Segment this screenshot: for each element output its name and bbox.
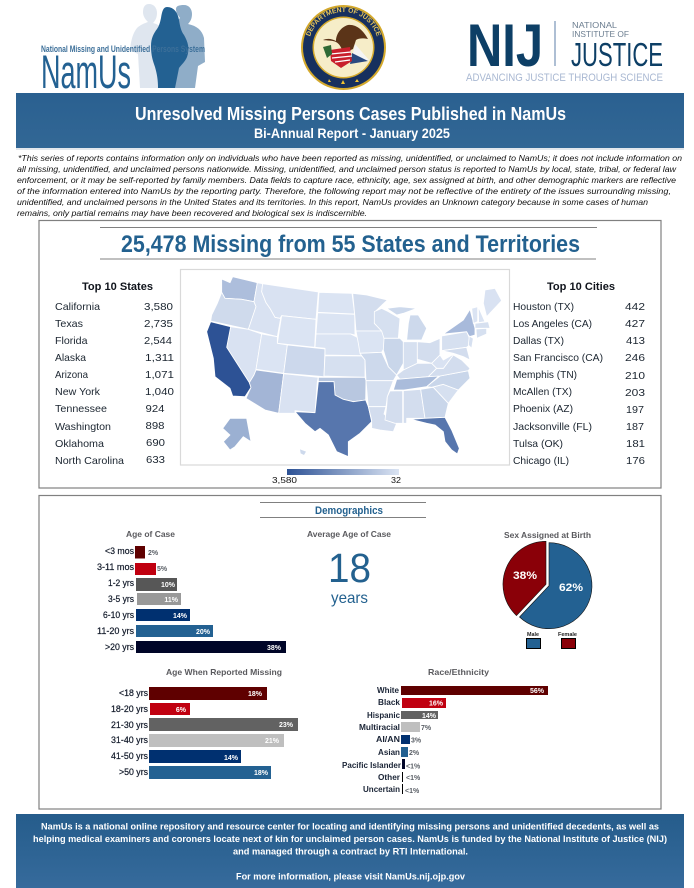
bar chart: race and ethnicity: Multiracial [359, 722, 400, 732]
stat: average age of case [307, 530, 391, 607]
map legend: 3,580 [272, 475, 297, 485]
bar chart: age when reported missing: 18% [254, 770, 269, 777]
bar chart: age of case: 3-11 mos [97, 562, 134, 572]
disclaimer text: unidentified, and unclaimed persons in the United States and its territories. In this report, NamUs provides an Unknown category because in some cases of human [17, 198, 648, 207]
table: top 10 states: North Carolina [55, 455, 124, 467]
bar chart: age when reported missing: <18 yrs [119, 688, 148, 698]
table: top 10 cities: Houston (TX) [513, 301, 574, 313]
title: Unresolved Missing Persons Cases Published in NamUs [135, 104, 566, 124]
bar chart: race and ethnicity: <1% [406, 775, 421, 782]
table: top 10 cities: McAllen (TX) [513, 386, 572, 398]
table: top 10 cities: Los Angeles (CA) [513, 318, 592, 330]
pie chart: sex assigned at birth: Sex Assigned at Birth [504, 531, 591, 540]
bar chart: age of case: <3 mos [105, 546, 134, 556]
table: top 10 cities: 442 [625, 301, 645, 313]
logo: National Institute of Justice: INSTITUTE OF [572, 29, 629, 39]
table: top 10 states: 924 [146, 403, 165, 415]
pie chart: sex assigned at birth: 38% [513, 570, 537, 582]
footer description: NamUs is a national online repository and resource center for locating and identifying missing persons and unidentified decedents, as well as [41, 822, 659, 832]
pie legend: Male [527, 632, 539, 638]
bar chart: race and ethnicity: <1% [406, 764, 421, 770]
bar chart: age of case: 11% [164, 597, 179, 604]
bar chart: race and ethnicity: 14% [422, 713, 437, 720]
bar chart: age when reported missing: 21-30 yrs [111, 720, 148, 730]
disclaimer text: enforcement, or it may be self-reported by family members. Data fields to capture race, ethnicity, age, sex assigned at birth, and other demographic markers are reflective [17, 176, 676, 185]
bar chart: race and ethnicity: Race/Ethnicity [428, 668, 489, 677]
panel: demographics [39, 496, 661, 809]
bar chart: age when reported missing: >50 yrs [119, 767, 148, 777]
bar chart: race and ethnicity: 3% [411, 738, 422, 744]
bar chart: age of case: 38% [267, 645, 282, 652]
bar chart: age of case: Age of Case [126, 530, 175, 539]
pie chart: sex assigned at birth [503, 531, 592, 648]
table: top 10 cities [513, 281, 645, 467]
bar chart: age of case: 11-20 yrs [97, 626, 134, 636]
table: top 10 cities: 187 [626, 421, 644, 433]
table: top 10 states: Washington [55, 421, 111, 433]
logo tagline: National Missing and Unidentified Persons System [41, 44, 205, 54]
stat: average age of case: 18 [328, 545, 371, 591]
table: top 10 states: 1,071 [145, 369, 174, 381]
table: top 10 states: 3,580 [144, 301, 173, 313]
bar chart: race and ethnicity: AI/AN [376, 734, 400, 744]
bar chart: race and ethnicity [342, 668, 548, 795]
footer website link text: For more information, please visit NamUs.nij.ojp.gov [236, 872, 465, 882]
table: top 10 states: Tennessee [55, 403, 107, 415]
table: top 10 cities: Chicago (IL) [513, 455, 569, 467]
icon: Department of Justice seal: DEPARTMENT OF JUSTICE [306, 7, 382, 36]
table: top 10 states: New York [55, 386, 101, 398]
map legend [272, 469, 401, 485]
footer description [33, 822, 667, 856]
footer description: and managed through a contract by RTI International. [233, 846, 468, 856]
footer description: helping medical examiners and coroners locate next of kin for unclaimed person cases. NamUs is funded by the National Institute of Justice (NIJ) [33, 834, 667, 844]
table: top 10 cities: 203 [625, 387, 645, 399]
subtitle: Bi-Annual Report - January 2025 [254, 126, 450, 141]
disclaimer text: remains, only partial remains may have been recovered and biological sex is indiscernible. [17, 209, 367, 218]
table: top 10 cities: Phoenix (AZ) [513, 403, 573, 415]
bar chart: age when reported missing: 18% [248, 691, 263, 698]
table: top 10 states: Alaska [55, 352, 86, 364]
logo wordmark: NamUs [41, 45, 131, 98]
table: top 10 cities: 210 [625, 370, 645, 382]
icon: Department of Justice seal [301, 5, 386, 90]
table: top 10 states: 1,311 [145, 352, 174, 364]
bar chart: race and ethnicity: White [377, 685, 399, 695]
bar chart: age of case: 6-10 yrs [103, 610, 134, 620]
table: top 10 states: Arizona [55, 369, 88, 381]
bar chart: race and ethnicity: <1% [405, 788, 420, 795]
bar chart: age of case: 14% [173, 613, 188, 620]
table: top 10 cities: 176 [626, 455, 645, 467]
demographics heading: Demographics [315, 505, 383, 517]
header band [16, 93, 684, 150]
stat: average age of case: years [331, 590, 368, 607]
bar chart: race and ethnicity: 16% [429, 700, 444, 708]
table: top 10 cities: 427 [625, 318, 645, 330]
table: top 10 states: Texas [55, 318, 83, 330]
bar chart: race and ethnicity: Asian [378, 747, 400, 757]
bar chart: age when reported missing: 21% [265, 738, 280, 745]
bar chart: race and ethnicity: Other [378, 772, 401, 782]
table: top 10 cities: Jacksonville (FL) [513, 421, 592, 433]
bar chart: age when reported missing: Age When Reported Missing [166, 668, 282, 677]
stat: average age of case: Average Age of Case [307, 530, 391, 539]
table: top 10 cities: San Francisco (CA) [513, 352, 603, 364]
table: top 10 states: 690 [146, 437, 165, 449]
bar chart: age of case: 5% [157, 566, 168, 573]
silhouettes: three people [130, 4, 205, 88]
bar chart: age when reported missing: 41-50 yrs [111, 751, 148, 761]
bar chart: age when reported missing: 14% [224, 755, 239, 762]
pie legend: Female [558, 632, 577, 638]
table: top 10 cities: 246 [625, 352, 645, 364]
table: top 10 cities: 197 [626, 404, 644, 416]
table: top 10 states: 633 [146, 454, 165, 466]
bar chart: race and ethnicity: Hispanic [367, 710, 400, 720]
pie chart: sex assigned at birth: 62% [559, 582, 583, 594]
table: top 10 cities: 181 [626, 438, 645, 450]
bar chart: race and ethnicity: Pacific Islander [342, 760, 402, 770]
bar chart: age of case: 20% [196, 629, 211, 636]
disclaimer text: of the information entered into NamUs by the reporting party. Therefore, the following report may not be reflective of the entirety of the issues surrounding missing, [17, 187, 671, 196]
table: top 10 states [55, 281, 174, 467]
disclaimer text [17, 154, 682, 218]
table: top 10 states: 898 [146, 420, 165, 432]
bar chart: age of case: 10% [161, 582, 176, 589]
pie legend [526, 632, 577, 648]
table: top 10 states: 1,040 [145, 386, 174, 398]
map legend: 32 [391, 475, 401, 485]
logo: NamUs [41, 4, 205, 98]
disclaimer text: all missing, unidentified, and unclaimed persons nationwide. Missing, unidentified, and unclaimed person status is reported to NamUs by local, state, tribal, or federal law [17, 165, 677, 174]
bar chart: age when reported missing: 6% [176, 707, 187, 714]
bar chart: race and ethnicity: 7% [421, 725, 432, 732]
bar chart: race and ethnicity: Uncertain [363, 784, 400, 794]
footer band [16, 814, 684, 888]
panel: missing persons by location [39, 220, 661, 488]
wordmark lines: NATIONAL [572, 20, 617, 30]
bar chart: age of case [97, 530, 286, 653]
table: top 10 states: Florida [55, 335, 88, 347]
table: top 10 states: 2,544 [144, 335, 172, 347]
bar chart: race and ethnicity: 56% [530, 688, 545, 695]
logo: National Institute of Justice [466, 12, 663, 84]
table: top 10 states: Oklahoma [55, 438, 104, 450]
disclaimer text: *This series of reports contains information only on individuals who have been reported as missing, unidentified, or unclaimed to NamUs; it does not include information on [18, 154, 682, 163]
bar chart: age when reported missing: 23% [279, 722, 294, 729]
heading: 25,478 Missing from 55 States and Territories [121, 231, 580, 258]
bar chart: age when reported missing: 18-20 yrs [111, 704, 148, 714]
bar chart: race and ethnicity: 2% [409, 750, 420, 757]
table: top 10 states: California [55, 301, 100, 313]
table: top 10 states: 2,735 [144, 318, 173, 330]
NIJ letters: NIJ [467, 12, 543, 79]
bar chart: age of case: >20 yrs [105, 642, 134, 652]
table heading: Top 10 Cities [547, 281, 615, 293]
table: top 10 cities: Dallas (TX) [513, 335, 564, 347]
table: top 10 cities: 413 [626, 335, 645, 347]
choropleth map of the United States [180, 270, 510, 485]
bar chart: race and ethnicity: Black [378, 697, 400, 707]
table: top 10 cities: Memphis (TN) [513, 369, 577, 381]
table heading: Top 10 States [82, 281, 153, 293]
bar chart: age of case: 2% [148, 550, 159, 557]
bar chart: age of case: 3-5 yrs [108, 594, 134, 604]
bar chart: age when reported missing [111, 668, 298, 779]
bar chart: age when reported missing: 31-40 yrs [111, 735, 148, 745]
bar chart: age of case: 1-2 yrs [108, 578, 134, 588]
table: top 10 cities: Tulsa (OK) [513, 438, 563, 450]
slogan: ADVANCING JUSTICE THROUGH SCIENCE [466, 72, 663, 84]
